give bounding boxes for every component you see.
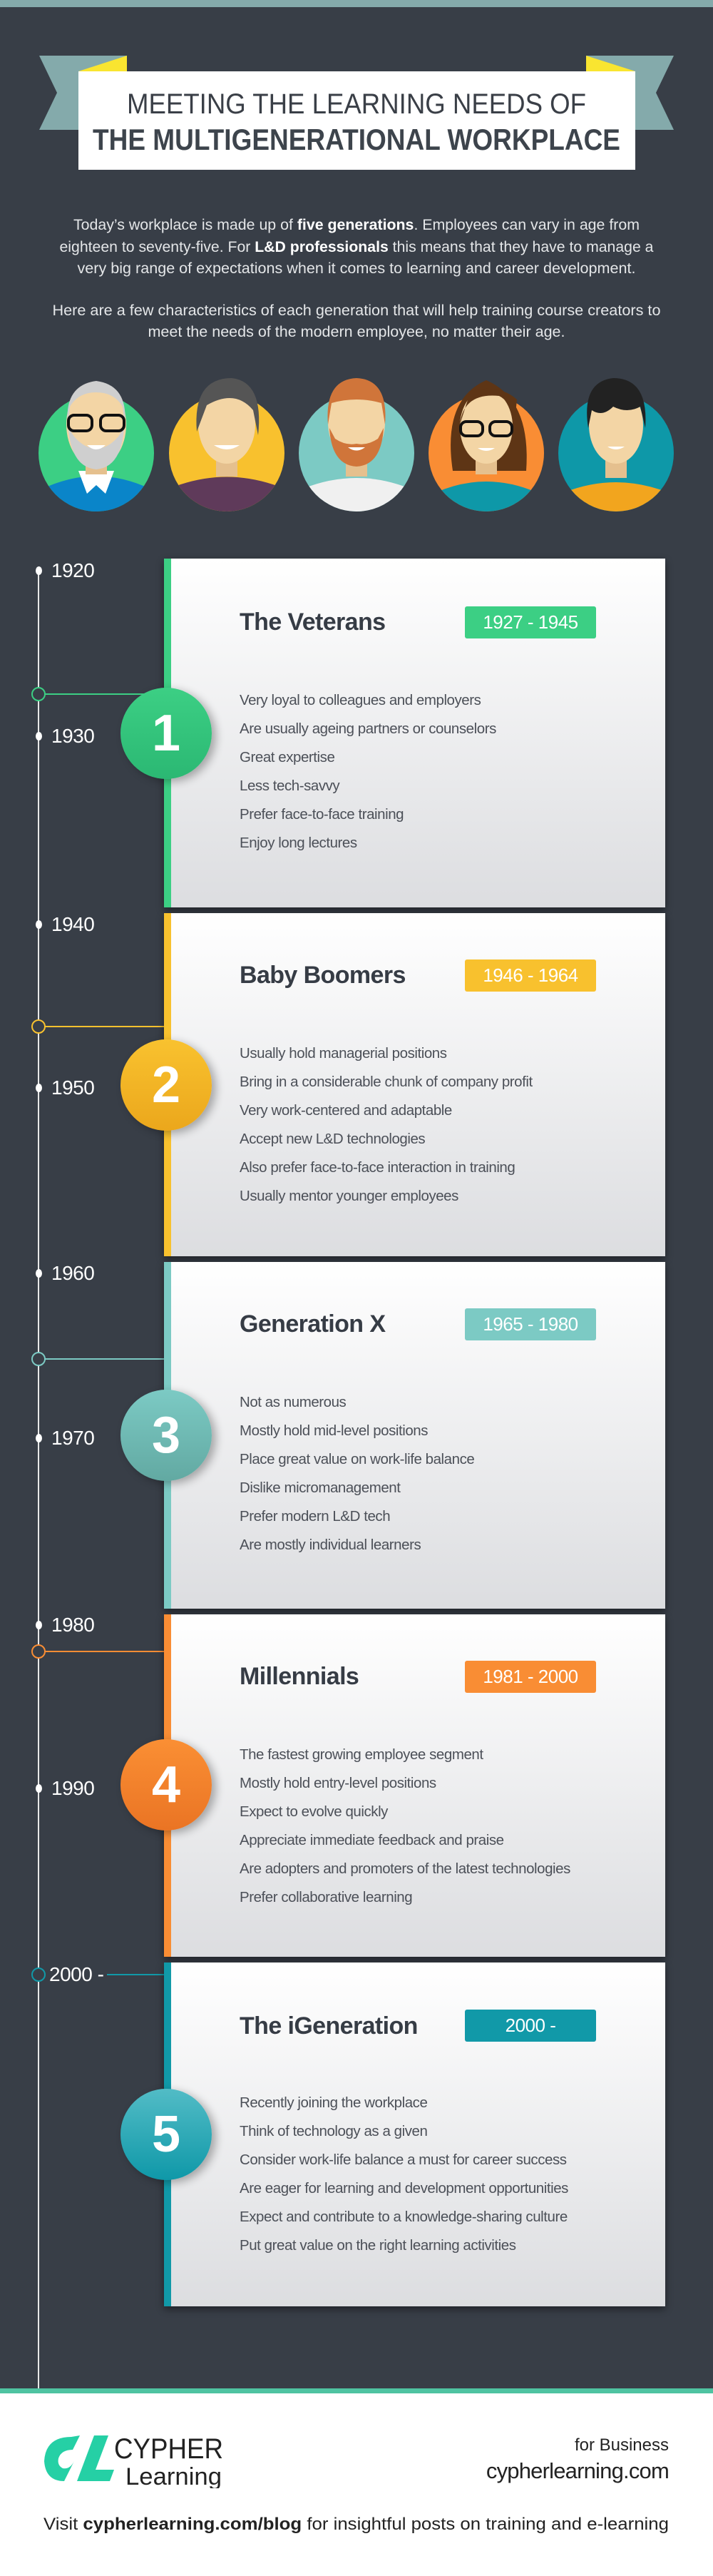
footer right text: cypherlearning.com [486, 2458, 669, 2483]
panel: veterans: Are usually ageing partners or counselors [240, 721, 496, 737]
intro text [53, 217, 660, 340]
year markers [36, 559, 103, 1985]
year markers: 1950 [51, 1076, 94, 1099]
panel: igeneration: Recently joining the workplace [240, 2094, 427, 2111]
panel: veterans: Great expertise [240, 749, 334, 765]
number badge 4 [120, 1739, 212, 1831]
panel: baby boomers: Usually mentor younger employees [240, 1188, 458, 1204]
panel: millennials: Mostly hold entry-level positions [240, 1775, 436, 1791]
avatars row [39, 378, 674, 511]
panel: veterans: Prefer face-to-face training [240, 806, 404, 823]
intro text: meet the needs of the modern employee, no matter their age. [148, 324, 565, 340]
footer teal bar [0, 2388, 713, 2393]
footer right text [486, 2435, 669, 2483]
connectors [31, 687, 164, 1982]
panel: generation x: Place great value on work-life balance [240, 1451, 474, 1467]
panel: millennials: Are adopters and promoters of the latest technologies [240, 1860, 570, 1877]
panel: millennials: Millennials [240, 1663, 359, 1690]
panel: generation x: Generation X [240, 1310, 385, 1338]
year markers: 1990 [51, 1777, 94, 1799]
year markers: 1970 [51, 1427, 94, 1449]
panel: veterans: Enjoy long lectures [240, 835, 357, 851]
year markers: 1930 [51, 725, 94, 747]
number badge 2: 2 [152, 1057, 180, 1114]
number badge 5: 5 [152, 2106, 180, 2163]
year markers: 1960 [51, 1262, 94, 1284]
timeline line [38, 567, 39, 2388]
number badge 4: 4 [152, 1756, 180, 1813]
panel: baby boomers: Baby Boomers [240, 962, 406, 989]
avatar: veteran [36, 381, 157, 517]
panel: veterans: The Veterans [240, 609, 385, 636]
avatar: gen x [299, 378, 414, 511]
panel: generation x: 1965 - 1980 [483, 1313, 578, 1335]
intro text: very big range of expectations when it comes to learning and career development. [77, 260, 636, 277]
intro text: eighteen to seventy-five. For L&D professionals this means that they have to manage a [60, 239, 654, 255]
panel: igeneration: 2000 - [506, 2015, 555, 2036]
intro text: Today’s workplace is made up of five generations. Employees can vary in age from [73, 217, 640, 233]
panel: generation x: Dislike micromanagement [240, 1480, 400, 1496]
panel: baby boomers: Very work-centered and adaptable [240, 1102, 452, 1119]
avatar: boomer [169, 378, 284, 511]
panel: veterans: Less tech-savvy [240, 778, 339, 794]
panel: baby boomers: Bring in a considerable chunk of company profit [240, 1074, 533, 1090]
panel: generation x: Mostly hold mid-level positions [240, 1422, 428, 1439]
year markers: 2000 - [49, 1963, 103, 1985]
footer logo: CYPHER [114, 2433, 223, 2465]
panel: igeneration: The iGeneration [240, 2012, 418, 2040]
title banner: MEETING THE LEARNING NEEDS OF [127, 88, 586, 120]
panel: igeneration: Think of technology as a given [240, 2123, 427, 2139]
number badge 5 [120, 2089, 212, 2180]
year markers: 1980 [51, 1614, 94, 1636]
panel: millennials: 1981 - 2000 [483, 1666, 578, 1687]
intro text: Here are a few characteristics of each generation that will help training course creators to [53, 302, 660, 319]
number badge 1 [120, 688, 212, 779]
panel: veterans: Very loyal to colleagues and employers [240, 692, 481, 708]
panel: igeneration: Consider work-life balance a must for career success [240, 2152, 567, 2168]
panel: baby boomers: Also prefer face-to-face interaction in training [240, 1159, 515, 1176]
title banner [39, 56, 674, 170]
avatar: millennial [429, 380, 544, 511]
footer visit line: Visit cypherlearning.com/blog for insightful posts on training and e-learning [43, 2515, 669, 2534]
number badge 3 [120, 1390, 212, 1481]
footer right text: for Business [575, 2435, 669, 2455]
number badge 3: 3 [152, 1407, 180, 1464]
panel: veterans: 1927 - 1945 [483, 611, 578, 633]
panel: generation x: Prefer modern L&D tech [240, 1508, 390, 1524]
panel: baby boomers: Accept new L&D technologies [240, 1131, 425, 1147]
number badge 1: 1 [152, 705, 180, 762]
year markers: 1920 [51, 559, 94, 581]
number badge 2 [120, 1039, 212, 1131]
avatar: igen [558, 378, 674, 511]
footer logo [44, 2433, 223, 2488]
panel: millennials: The fastest growing employee segment [240, 1746, 483, 1763]
top bar [0, 0, 713, 7]
title banner: THE MULTIGENERATIONAL WORKPLACE [93, 123, 620, 156]
panel: veterans [164, 559, 665, 907]
panel: millennials: Prefer collaborative learning [240, 1889, 412, 1905]
panel: millennials [164, 1614, 665, 1957]
panel: generation x: Not as numerous [240, 1394, 346, 1410]
panel: baby boomers [164, 913, 665, 1256]
panel: millennials: Expect to evolve quickly [240, 1803, 388, 1820]
panel: baby boomers: Usually hold managerial positions [240, 1045, 447, 1062]
panel: igeneration: Put great value on the right learning activities [240, 2237, 516, 2254]
panel: igeneration [164, 1962, 665, 2306]
panel: millennials: Appreciate immediate feedback and praise [240, 1832, 504, 1848]
panel: baby boomers: 1946 - 1964 [483, 964, 578, 986]
panel: generation x: Are mostly individual learners [240, 1537, 421, 1553]
panel: igeneration: Are eager for learning and development opportunities [240, 2180, 568, 2196]
year markers: 1940 [51, 913, 94, 935]
panel: generation x [164, 1262, 665, 1609]
panel: igeneration: Expect and contribute to a knowledge-sharing culture [240, 2209, 568, 2225]
